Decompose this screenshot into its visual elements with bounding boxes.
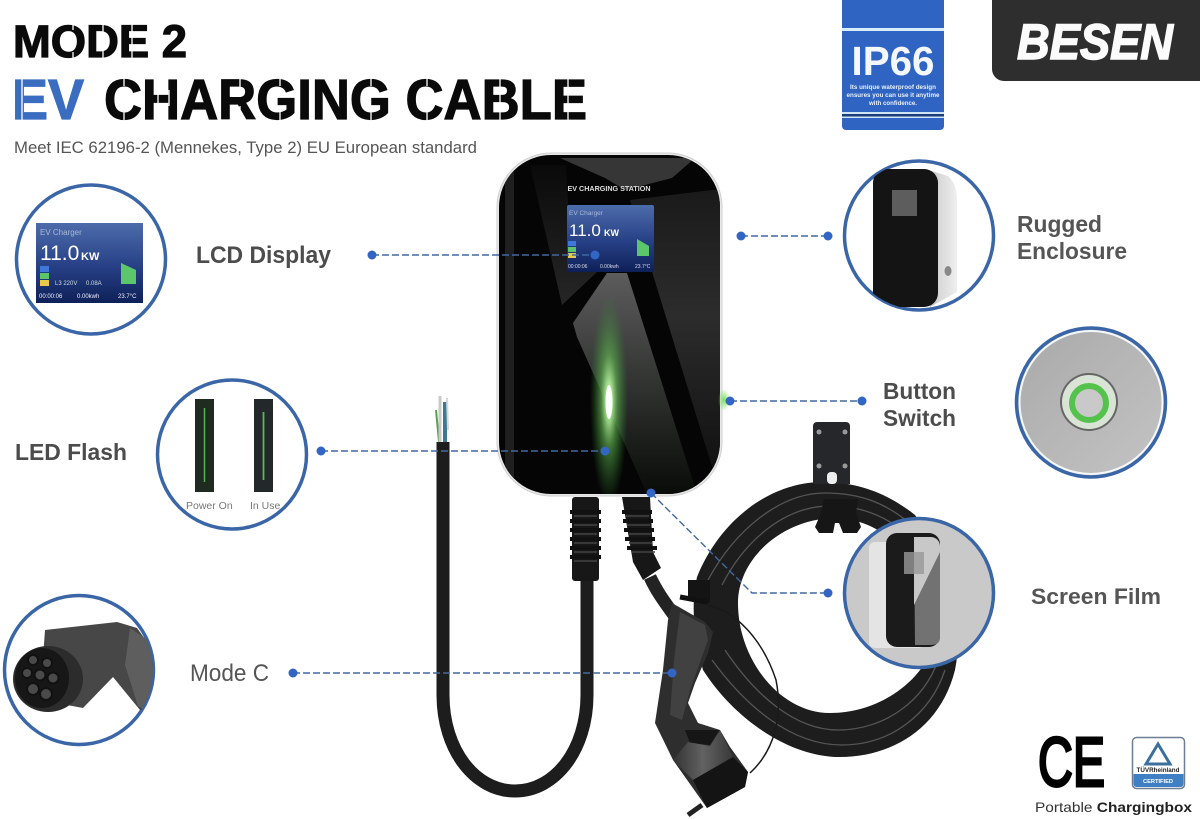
- label: Rugged Enclosure: Rugged: [1017, 211, 1102, 237]
- logo: BESEN: [992, 0, 1200, 81]
- panel: LCD detail: 0.08A: [86, 281, 102, 287]
- strain relief right and lead to connector: [622, 497, 674, 615]
- strain relief left: [570, 497, 601, 581]
- panel: screen film detail: [844, 518, 994, 668]
- station screen: 23.7°C: [635, 264, 651, 270]
- panel: LCD detail: 00:00:06: [39, 294, 63, 300]
- panel: rugged enclosure detail: [844, 161, 994, 310]
- certification: TUV mark: TÜVRheinland: [1136, 765, 1180, 774]
- label: LED Flash: LED Flash: [15, 439, 127, 465]
- label: LCD Display: LCD Display: [196, 242, 332, 269]
- station screen: EV Charger: [569, 210, 604, 217]
- certification: CE mark: CE: [1038, 723, 1105, 801]
- panel: LED flash detail: In Use: [250, 500, 281, 512]
- label: Rugged Enclosure: [1017, 211, 1127, 264]
- station screen: [567, 205, 654, 272]
- title: EV: [12, 68, 84, 132]
- certification: TUV mark: [1132, 738, 1184, 788]
- panel: LCD detail: 11.0: [40, 242, 79, 265]
- station screen: 11.0: [569, 221, 601, 240]
- coiled cable: [694, 482, 958, 757]
- certification: TUV mark: CERTIFIED: [1143, 779, 1173, 785]
- station screen: 0.00kwh: [600, 264, 619, 270]
- label: Button Switch: Button: [883, 378, 956, 404]
- callout lines: [293, 236, 862, 673]
- station label: EV CHARGING STATION: [568, 184, 650, 193]
- panel: LCD detail: EV Charger: [40, 228, 82, 237]
- title: [12, 16, 587, 132]
- wall bracket: [813, 422, 861, 533]
- station screen: KW: [604, 228, 619, 238]
- panel: button switch detail: [1016, 328, 1166, 477]
- badge: IP66: IP66: [852, 38, 934, 84]
- badge: IP66: Its unique waterproof design: [850, 84, 936, 91]
- side button glow: [718, 389, 730, 411]
- panel: LCD detail: [16, 185, 166, 334]
- label: Rugged Enclosure: Enclosure: [1017, 238, 1127, 264]
- panel: LED flash detail: [158, 380, 306, 529]
- station screen: 00:00:06: [568, 264, 588, 270]
- title: MODE 2: [13, 16, 187, 67]
- badge: IP66: [842, 0, 944, 130]
- panel: LCD detail: KW: [81, 251, 100, 263]
- panel: LCD detail: 0.00kwh: [77, 294, 99, 300]
- badge: IP66: with confidence.: [868, 100, 917, 107]
- panel: LCD detail: L3 220V: [55, 281, 77, 287]
- title: CHARGING CABLE: [104, 68, 587, 132]
- subtitle: Meet IEC 62196-2 (Mennekes, Type 2) EU European standard: [14, 139, 477, 157]
- wall box charging station: [497, 153, 730, 505]
- logo: BESEN: BESEN: [1017, 14, 1174, 70]
- charging connector: [655, 580, 778, 815]
- label: Button Switch: Switch: [883, 405, 956, 431]
- label: Button Switch: [883, 378, 956, 431]
- panel: LCD detail: 23.7°C: [118, 294, 137, 300]
- input cable with bare wires: [436, 396, 587, 791]
- label: Screen Film: Screen Film: [1031, 584, 1161, 609]
- callout dots: [288, 232, 866, 678]
- caption: Portable Chargingbox: Portable Chargingbox: [1035, 799, 1192, 815]
- panel: Mode C connector detail: [4, 596, 155, 744]
- badge: IP66: ensures you can use it anytime: [846, 92, 940, 99]
- panel: LED flash detail: Power On: [186, 500, 233, 512]
- label: Mode C: Mode C: [190, 660, 269, 687]
